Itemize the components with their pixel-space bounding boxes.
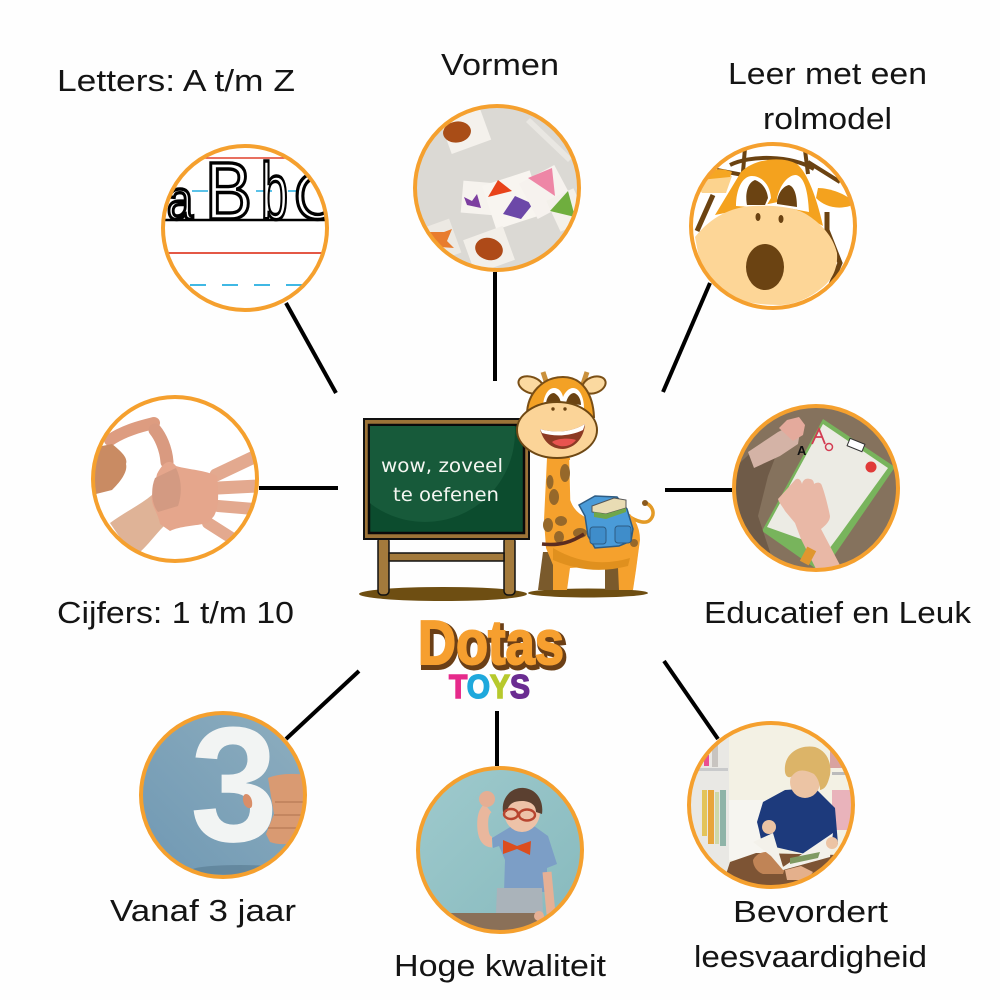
circle: letter tracing: C <box>294 159 338 233</box>
chalk text: te oefenen <box>393 484 499 506</box>
circle: letter tracing: b <box>261 147 288 236</box>
circle: number three: 3 <box>190 693 278 876</box>
horns and ears <box>543 372 587 384</box>
label: Bevordert leesvaardigheid <box>694 894 927 974</box>
circle: number three <box>139 711 307 879</box>
chalkboard <box>363 418 530 596</box>
giraffe mascot <box>516 372 653 590</box>
label: Hoge kwaliteit: Hoge kwaliteit <box>394 948 606 983</box>
logo: Dotas Toys: Dotas <box>418 609 564 678</box>
circle: shape cards <box>410 100 588 275</box>
ground shadows <box>359 587 648 601</box>
chalk text: wow, zoveel <box>381 455 503 477</box>
circle: giraffe face <box>688 140 858 312</box>
label: Vanaf 3 jaar: Vanaf 3 jaar <box>110 893 296 928</box>
circle: boy with glasses <box>414 764 586 938</box>
label: Bevordert leesvaardigheid: leesvaardigheid <box>694 939 927 974</box>
circle: letter tracing <box>160 143 338 313</box>
circle: child reading <box>685 719 857 895</box>
logo: Dotas Toys: Dotas <box>420 612 566 681</box>
label: Letters: Letters: A t/m Z <box>57 63 295 98</box>
circle: tracing book photo <box>730 400 902 575</box>
logo: Dotas Toys <box>418 609 566 705</box>
circle: tracing book photo: A <box>797 443 807 458</box>
label: Leer met een rolmodel <box>728 56 927 136</box>
backpack <box>579 496 633 548</box>
connector lines <box>259 272 732 766</box>
chalk text <box>381 455 503 506</box>
label: Bevordert leesvaardigheid: Bevordert <box>733 894 888 929</box>
label: Vormen: Vormen <box>441 47 559 82</box>
label: Cijfers: Cijfers: 1 t/m 10 <box>57 595 294 630</box>
label: Leer met een rolmodel: rolmodel <box>763 101 892 136</box>
label: Leer met een rolmodel: Leer met een <box>728 56 927 91</box>
logo: Dotas Toys: TOYS <box>449 668 530 705</box>
label: Educatief en Leuk: Educatief en Leuk <box>704 595 972 630</box>
circle: letter tracing: a <box>167 168 194 231</box>
circle: counting hand <box>90 394 260 564</box>
circle: letter tracing: B <box>205 146 252 237</box>
